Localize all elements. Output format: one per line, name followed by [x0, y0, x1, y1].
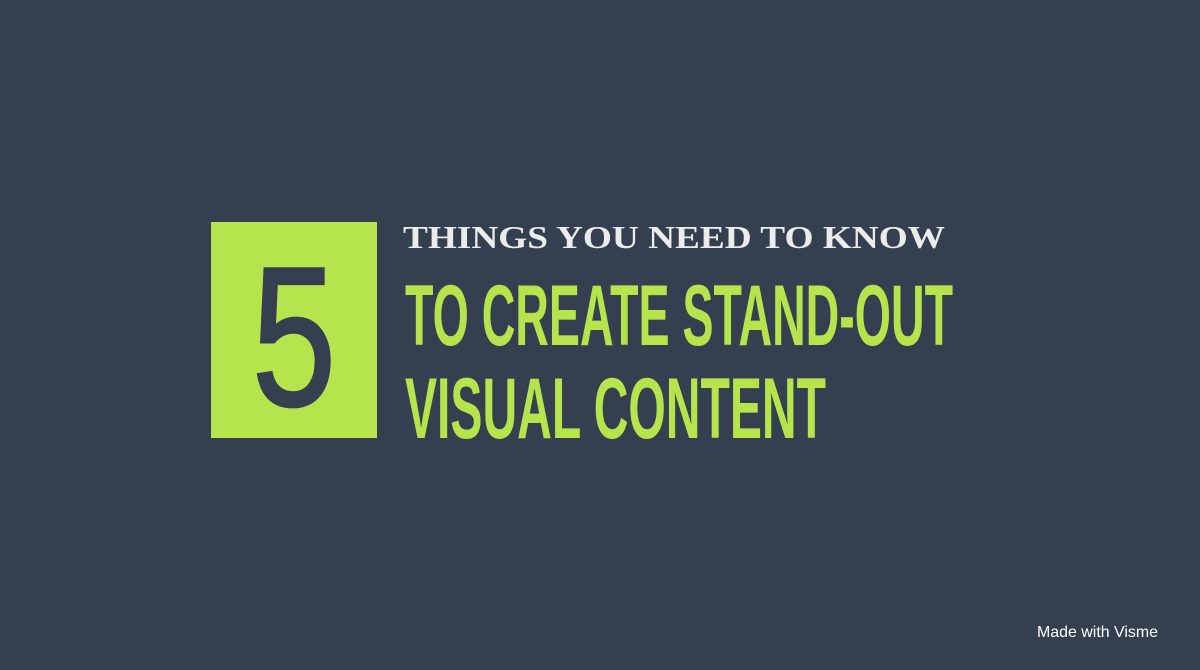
subtitle: THINGS YOU NEED TO KNOW — [403, 219, 945, 255]
footer credit: Made with Visme — [1037, 624, 1158, 641]
title — [405, 268, 953, 457]
title: VISUAL CONTENT — [405, 361, 826, 457]
number badge: 5 — [252, 227, 336, 448]
number badge — [211, 222, 377, 448]
